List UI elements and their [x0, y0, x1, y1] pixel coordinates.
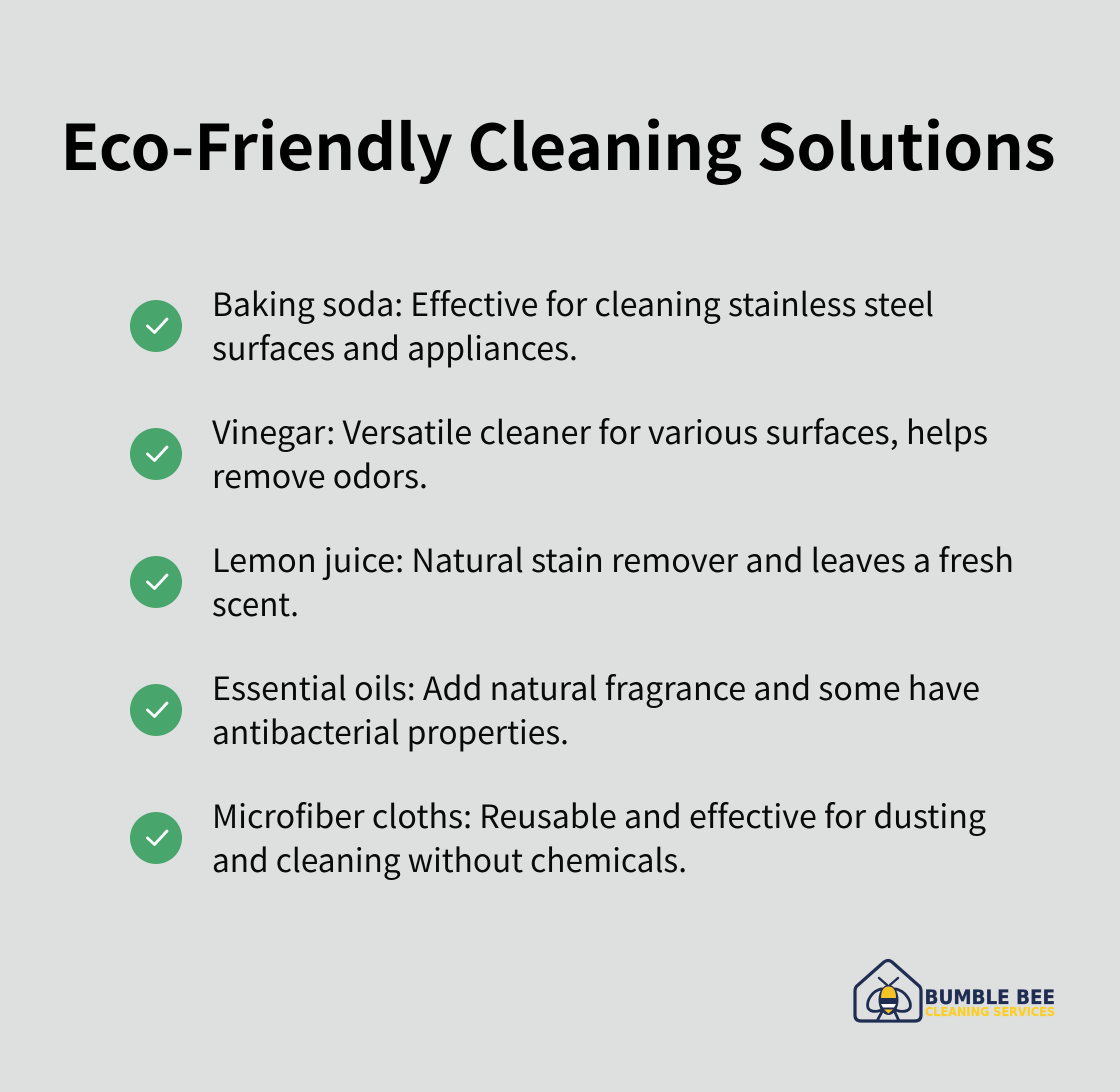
item: microfiber cloths: [130, 792, 986, 882]
item: baking soda: [130, 280, 934, 370]
checklist: [130, 280, 1014, 882]
icon: check: [130, 428, 182, 480]
icon: check: [130, 556, 182, 608]
item: essential oils: [130, 664, 980, 754]
text: essential oils: antibacterial properties.: [212, 708, 569, 754]
text: lemon juice: Lemon juice: Natural stain remover and leaves a fresh: [212, 536, 1014, 582]
item: vinegar: [130, 408, 988, 498]
text: vinegar: remove odors.: [212, 452, 428, 498]
text: baking soda: [212, 280, 934, 370]
text: baking soda: Baking soda: Effective for cleaning stainless steel: [212, 280, 934, 326]
icon: check: [130, 684, 182, 736]
text: microfiber cloths: [212, 792, 986, 882]
icon: check: [130, 812, 182, 864]
logo name: BUMBLE BEE: [924, 986, 1055, 1009]
text: vinegar: Vinegar: Versatile cleaner for various surfaces, helps: [212, 408, 988, 454]
icon: house with bee: [855, 960, 921, 1021]
icon: check: [130, 300, 182, 352]
text: baking soda: surfaces and appliances.: [212, 324, 578, 370]
logo tagline: CLEANING SERVICES: [925, 1005, 1055, 1019]
logo: Bumble Bee Cleaning Services: [855, 960, 1055, 1021]
text: lemon juice: scent.: [212, 580, 299, 626]
title: Eco-Friendly Cleaning Solutions: [60, 98, 1056, 189]
text: lemon juice: [212, 536, 1014, 626]
text: microfiber cloths: and cleaning without chemicals.: [212, 836, 687, 882]
text: vinegar: [212, 408, 988, 498]
item: lemon juice: [130, 536, 1014, 626]
text: essential oils: Essential oils: Add natural fragrance and some have: [212, 664, 980, 710]
text: microfiber cloths: Microfiber cloths: Reusable and effective for dusting: [212, 792, 986, 838]
text: essential oils: [212, 664, 980, 754]
